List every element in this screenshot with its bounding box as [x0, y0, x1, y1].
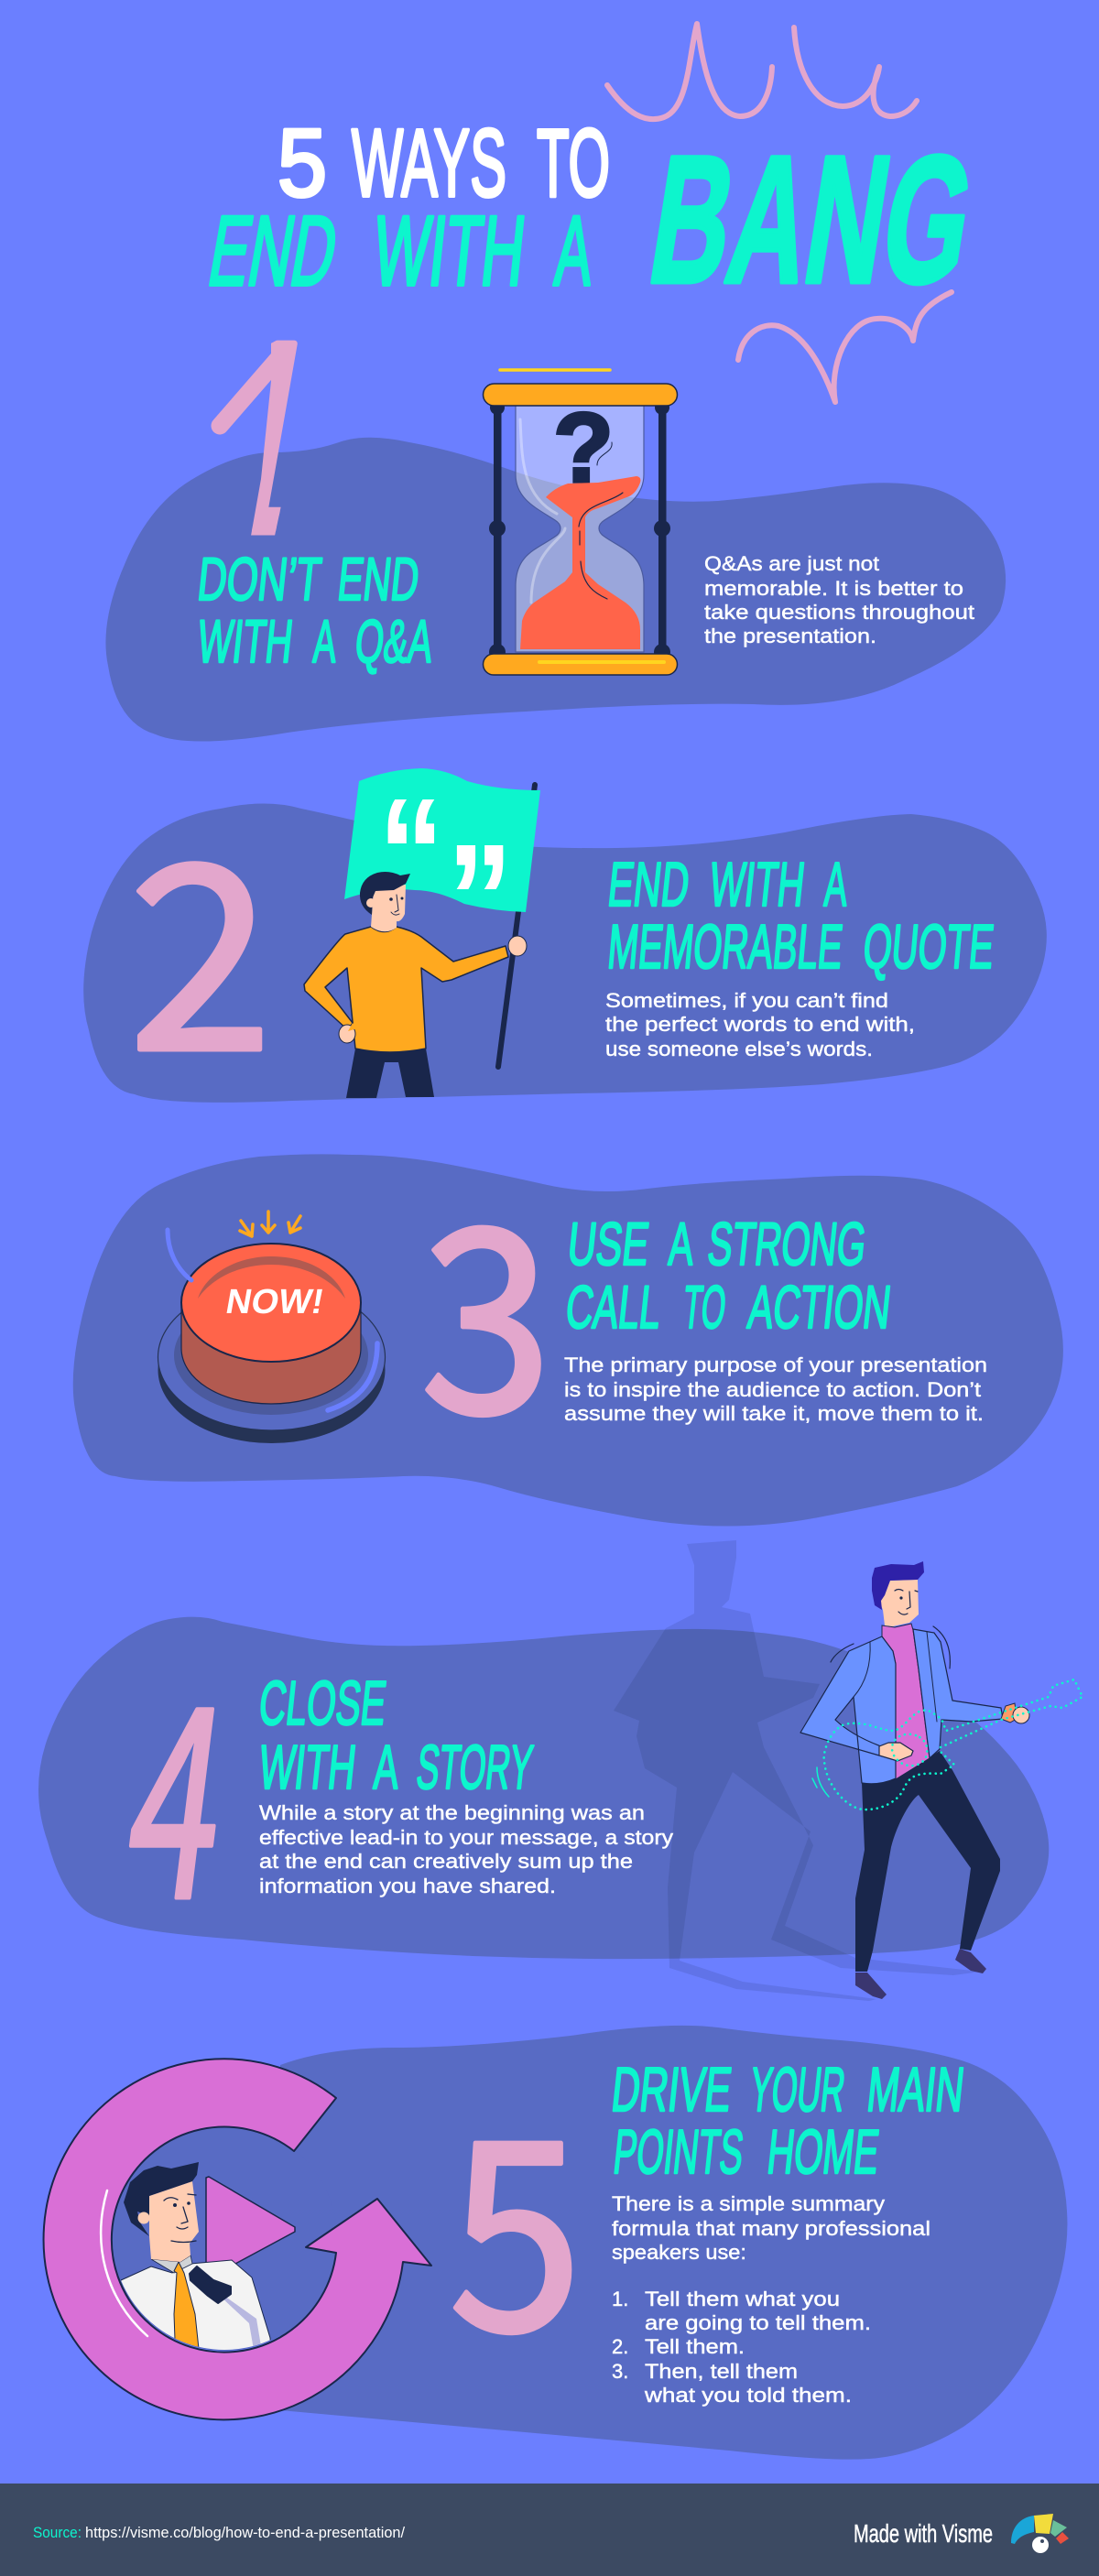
heading 3 — [562, 1210, 894, 1342]
source line: Source: — [33, 2524, 82, 2541]
icon: now button: NOW! — [223, 1282, 327, 1321]
illustration: man with quote flag — [304, 766, 540, 1098]
heading 3: ACTION — [745, 1274, 894, 1342]
heading 2: A — [822, 850, 850, 919]
heading 3: STRONG — [704, 1211, 869, 1278]
body text 2: the perfect words to end with, — [605, 1013, 915, 1036]
heading 4: A — [372, 1733, 401, 1802]
heading 3: TO — [680, 1274, 729, 1342]
source line: https://visme.co/blog/how-to-end-a-presentation/ — [85, 2524, 405, 2541]
icon: now button — [158, 1212, 385, 1443]
heading 4: CLOSE — [256, 1668, 389, 1738]
heading 1: DON’T — [194, 546, 324, 614]
body text 4: While a story at the beginning was an — [259, 1801, 645, 1824]
body text 5 — [612, 2192, 930, 2264]
title line: 5 ways to: 5 — [277, 110, 327, 217]
body text 4: information you have shared. — [259, 1875, 556, 1897]
panel: step 4 — [38, 1540, 1083, 2001]
number 5: 5 — [449, 2027, 582, 2406]
body text 5: speakers use: — [612, 2241, 746, 2264]
heading 5: MAIN — [864, 2055, 967, 2125]
body text 4: effective lead-in to your message, a story — [259, 1826, 673, 1849]
heading 3: A — [667, 1210, 695, 1277]
number 1 — [211, 341, 298, 535]
burst squiggles around bang — [607, 24, 952, 402]
body text 3: is to inspire the audience to action. Don’t — [564, 1378, 981, 1401]
numbered list: Tell them. — [645, 2335, 745, 2358]
body text 2: Sometimes, if you can’t find — [605, 989, 888, 1012]
heading 5: HOME — [764, 2117, 882, 2187]
heading 3: USE — [564, 1211, 652, 1278]
icon: hourglass: ? — [553, 392, 614, 503]
heading 2: END — [604, 850, 692, 919]
heading 1 — [194, 546, 436, 676]
blob background 4 — [38, 1617, 1049, 1959]
numbered list: Tell them what you — [645, 2288, 840, 2310]
blob background 1 — [105, 438, 1006, 742]
heading 1: WITH — [194, 608, 296, 676]
numbered list: are going to tell them. — [645, 2311, 871, 2334]
illustration: man with quote flag: “ — [378, 766, 444, 940]
title line: end with a: WITH — [369, 195, 530, 306]
title line: end with a: A — [551, 195, 596, 306]
title line: 5 ways to: TO — [537, 110, 610, 217]
heading 2: WITH — [706, 850, 808, 919]
heading 4: STORY — [413, 1733, 536, 1802]
icon: circular arrow with speaker — [44, 2059, 431, 2419]
body text 3: The primary purpose of your presentation — [564, 1353, 987, 1376]
numbered list: 2. — [612, 2335, 628, 2358]
numbered list: 3. — [612, 2360, 628, 2383]
title line: end with a: END — [201, 196, 345, 307]
heading 5 — [608, 2055, 967, 2187]
heading 3: CALL — [562, 1274, 664, 1342]
shadow of guitar player — [614, 1540, 981, 2001]
body text 1: take questions throughout — [704, 601, 974, 624]
blob background 2 — [83, 804, 1047, 1103]
heading 2: MEMORABLE — [605, 912, 845, 982]
body text 1: the presentation. — [704, 625, 876, 647]
body text 3: assume they will take it, move them to it. — [564, 1402, 984, 1425]
numbered list: Then, tell them — [645, 2360, 798, 2383]
title — [201, 24, 985, 402]
body text 1: memorable. It is better to — [704, 577, 963, 600]
panel: step 1 — [106, 341, 1006, 742]
heading 5: YOUR — [746, 2055, 848, 2125]
body text 5: There is a simple summary — [612, 2192, 885, 2215]
made with visme: Made with Visme — [854, 2519, 993, 2548]
footer — [0, 2484, 1099, 2576]
illustration: man with quote flag: ” — [447, 812, 513, 986]
numbered list: 1. — [612, 2288, 628, 2310]
body text 5: formula that many professional — [612, 2217, 930, 2240]
illustration: air guitar player — [800, 1561, 1083, 1999]
body text 1 — [704, 552, 974, 647]
blob background 5 — [280, 2026, 1067, 2460]
body text 4 — [259, 1801, 673, 1897]
body text 1: Q&As are just not — [704, 552, 879, 575]
heading 4: WITH — [256, 1733, 359, 1802]
title line: end with a — [201, 195, 596, 307]
number 3: 3 — [420, 1118, 552, 1486]
panel: step 3 — [73, 1118, 1063, 1526]
icon: hourglass — [484, 370, 678, 675]
heading 5: DRIVE — [608, 2055, 734, 2125]
body text 3 — [564, 1353, 987, 1425]
numbered list — [612, 2288, 871, 2407]
heading 1: A — [311, 607, 338, 675]
number 1: 1 — [165, 229, 365, 607]
icon: visme logo — [1011, 2514, 1069, 2553]
heading 5: POINTS — [610, 2117, 746, 2187]
panel: step 2 — [83, 752, 1047, 1124]
heading 2 — [604, 850, 996, 982]
number 4: 4 — [112, 1592, 248, 1974]
body text 2 — [605, 989, 915, 1060]
heading 1: END — [334, 546, 422, 614]
blob background 3 — [73, 1154, 1063, 1526]
title line: 5 ways to: WAYS — [352, 110, 506, 217]
numbered list: what you told them. — [644, 2384, 852, 2407]
body text 4: at the end can creatively sum up the — [259, 1850, 633, 1873]
panel: step 5 — [44, 2026, 1067, 2460]
heading 4 — [256, 1668, 536, 1802]
heading 2: QUOTE — [861, 912, 996, 982]
body text 2: use someone else’s words. — [605, 1038, 873, 1060]
number 2: 2 — [128, 752, 273, 1124]
heading 1: Q&A — [352, 608, 436, 676]
